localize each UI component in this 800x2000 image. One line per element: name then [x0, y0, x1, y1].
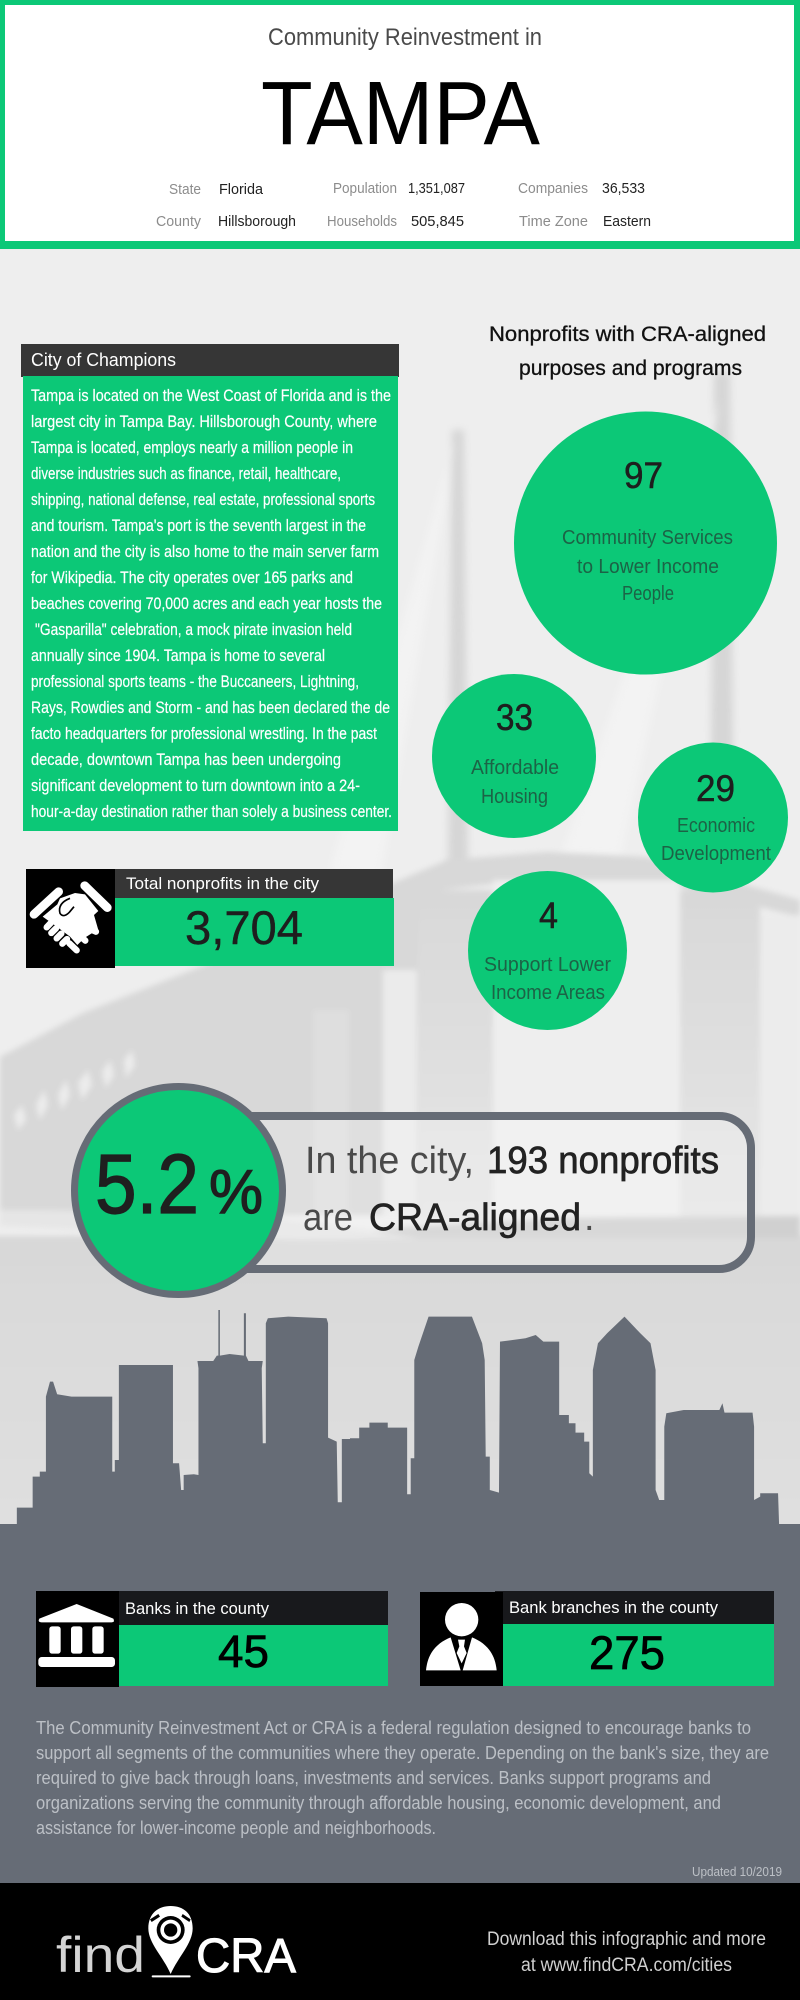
- circle: affordable housing: Housing: [481, 786, 548, 808]
- circle: affordable housing: Affordable: [471, 757, 559, 779]
- panel: banks in the county: [36, 1591, 388, 1687]
- text: download notice: at www.findCRA.com/cities: [521, 1955, 732, 1976]
- callout text: 193 nonprofits: [487, 1140, 719, 1182]
- city description: annually since 1904. Tampa is home to several: [31, 647, 325, 665]
- city facts: Florida: [219, 181, 264, 198]
- circle: support lower income areas: 4: [539, 895, 558, 936]
- text block: CRA explanation: [36, 1718, 769, 1838]
- label: Total nonprofits in the city: [126, 874, 319, 893]
- heading: nonprofits with CRA-aligned purposes: [489, 323, 766, 380]
- city facts: [156, 180, 651, 230]
- city description: for Wikipedia. The city operates over 165 parks and: [31, 569, 353, 587]
- title line: Community Reinvestment in: [268, 24, 542, 51]
- city description: hour-a-day destination rather than solely a business center.: [31, 803, 392, 821]
- logo: findCRA: find: [56, 1927, 145, 1983]
- city description: Rays, Rowdies and Storm - and has been declared the de: [31, 699, 390, 717]
- callout: 5.2 percent CRA-aligned: [74, 1086, 751, 1294]
- percentage: 5.2: [95, 1137, 199, 1231]
- circle: economic development: [638, 742, 788, 892]
- callout text: are: [303, 1197, 353, 1239]
- callout text: [303, 1140, 719, 1239]
- city facts: State: [169, 181, 201, 198]
- text block: CRA explanation: required to give back through loans, investments and services. Banks support programs and: [36, 1768, 711, 1788]
- circle: community services: Community Services: [562, 527, 733, 549]
- city facts: Households: [327, 213, 397, 230]
- city facts: 36,533: [602, 180, 645, 197]
- number: 3,704: [185, 901, 303, 954]
- city description: professional sports teams - the Buccaneers, Lightning,: [31, 673, 359, 691]
- circle: affordable housing: 33: [496, 697, 533, 738]
- circle: support lower income areas: Support Lower: [484, 954, 611, 976]
- number: 275: [589, 1626, 665, 1679]
- percentage: [95, 1137, 263, 1231]
- city facts: Population: [333, 180, 397, 197]
- callout text: .: [584, 1197, 595, 1239]
- label: Bank branches in the county: [509, 1598, 718, 1617]
- city description: significant development to turn downtown into a 24-: [31, 777, 360, 795]
- circle: support lower income areas: Income Areas: [491, 982, 605, 1004]
- city name: TAMPA: [261, 64, 540, 164]
- city description: decade, downtown Tampa has been undergoing: [31, 751, 341, 769]
- text block: CRA explanation: organizations serving the community through affordable housing, economic development, and: [36, 1793, 721, 1813]
- city description: [31, 387, 392, 821]
- panel heading: City of Champions: [31, 350, 176, 370]
- circle: community services: [514, 412, 777, 674]
- text block: CRA explanation: assistance for lower-income people and neighborhoods.: [36, 1818, 436, 1838]
- icon: bank: [38, 1604, 115, 1667]
- circle: economic development: Development: [661, 843, 771, 865]
- heading: nonprofits with CRA-aligned purposes: Nonprofits with CRA-aligned: [489, 323, 766, 346]
- city facts: 1,351,087: [408, 180, 465, 197]
- panel: bank branches in the county: [420, 1591, 774, 1686]
- circle: community services: to Lower Income: [577, 556, 719, 578]
- text: download notice: Download this infographic and more: [487, 1929, 766, 1950]
- logo: findCRA: [56, 1906, 296, 1983]
- icon: handshake: [34, 886, 107, 950]
- text: download notice: [487, 1929, 766, 1976]
- city facts: 505,845: [411, 213, 464, 230]
- city facts: Hillsborough: [218, 213, 296, 230]
- city facts: Time Zone: [519, 213, 588, 230]
- label: Banks in the county: [125, 1599, 269, 1618]
- text: updated date: Updated 10/2019: [692, 1864, 782, 1879]
- city description: diverse industries such as finance, retail, healthcare,: [31, 465, 341, 483]
- city facts: County: [156, 213, 201, 230]
- city facts: Eastern: [603, 213, 651, 230]
- city description: largest city in Tampa Bay. Hillsborough County, where: [31, 413, 377, 431]
- city description: nation and the city is also home to the main server farm: [31, 543, 379, 561]
- skyline silhouette: [0, 1310, 800, 1560]
- panel: lower gray section: [0, 1524, 800, 1884]
- icon: person in suit: [426, 1603, 497, 1670]
- circle: community services: 97: [624, 455, 663, 496]
- circle: economic development: Economic: [677, 815, 755, 837]
- percentage: %: [209, 1158, 263, 1227]
- panel: footer: [0, 1883, 800, 2000]
- panel: header: [0, 0, 800, 249]
- callout text: CRA-aligned: [369, 1197, 581, 1239]
- city description: facto headquarters for professional wrestling. In the past: [31, 725, 377, 743]
- city description: and tourism. Tampa's port is the seventh largest in the: [31, 517, 366, 535]
- panel: total nonprofits: [26, 869, 394, 968]
- text block: CRA explanation: The Community Reinvestment Act or CRA is a federal regulation designed to encourage banks to: [36, 1718, 751, 1738]
- circle: community services: People: [622, 583, 674, 605]
- panel: City of Champions: [21, 344, 399, 831]
- city description: Tampa is located on the West Coast of Florida and is the: [31, 387, 391, 405]
- icon: map pin: [148, 1906, 193, 1977]
- circle: affordable housing: [432, 674, 596, 838]
- background: bridge photo: [0, 249, 800, 1546]
- heading: nonprofits with CRA-aligned purposes: purposes and programs: [519, 357, 742, 380]
- number: 45: [218, 1626, 269, 1677]
- city description: beaches covering 70,000 acres and each year hosts the: [31, 595, 382, 613]
- city description: shipping, national defense, real estate, professional sports: [31, 491, 375, 509]
- logo: findCRA: CRA: [196, 1930, 296, 1983]
- callout text: In the city,: [305, 1140, 474, 1182]
- circle: economic development: 29: [696, 768, 735, 809]
- city description: "Gasparilla" celebration, a mock pirate invasion held: [35, 621, 352, 639]
- city facts: Companies: [518, 180, 588, 197]
- circle: support lower income areas: [468, 871, 627, 1030]
- city description: Tampa is located, employs nearly a million people in: [31, 439, 353, 457]
